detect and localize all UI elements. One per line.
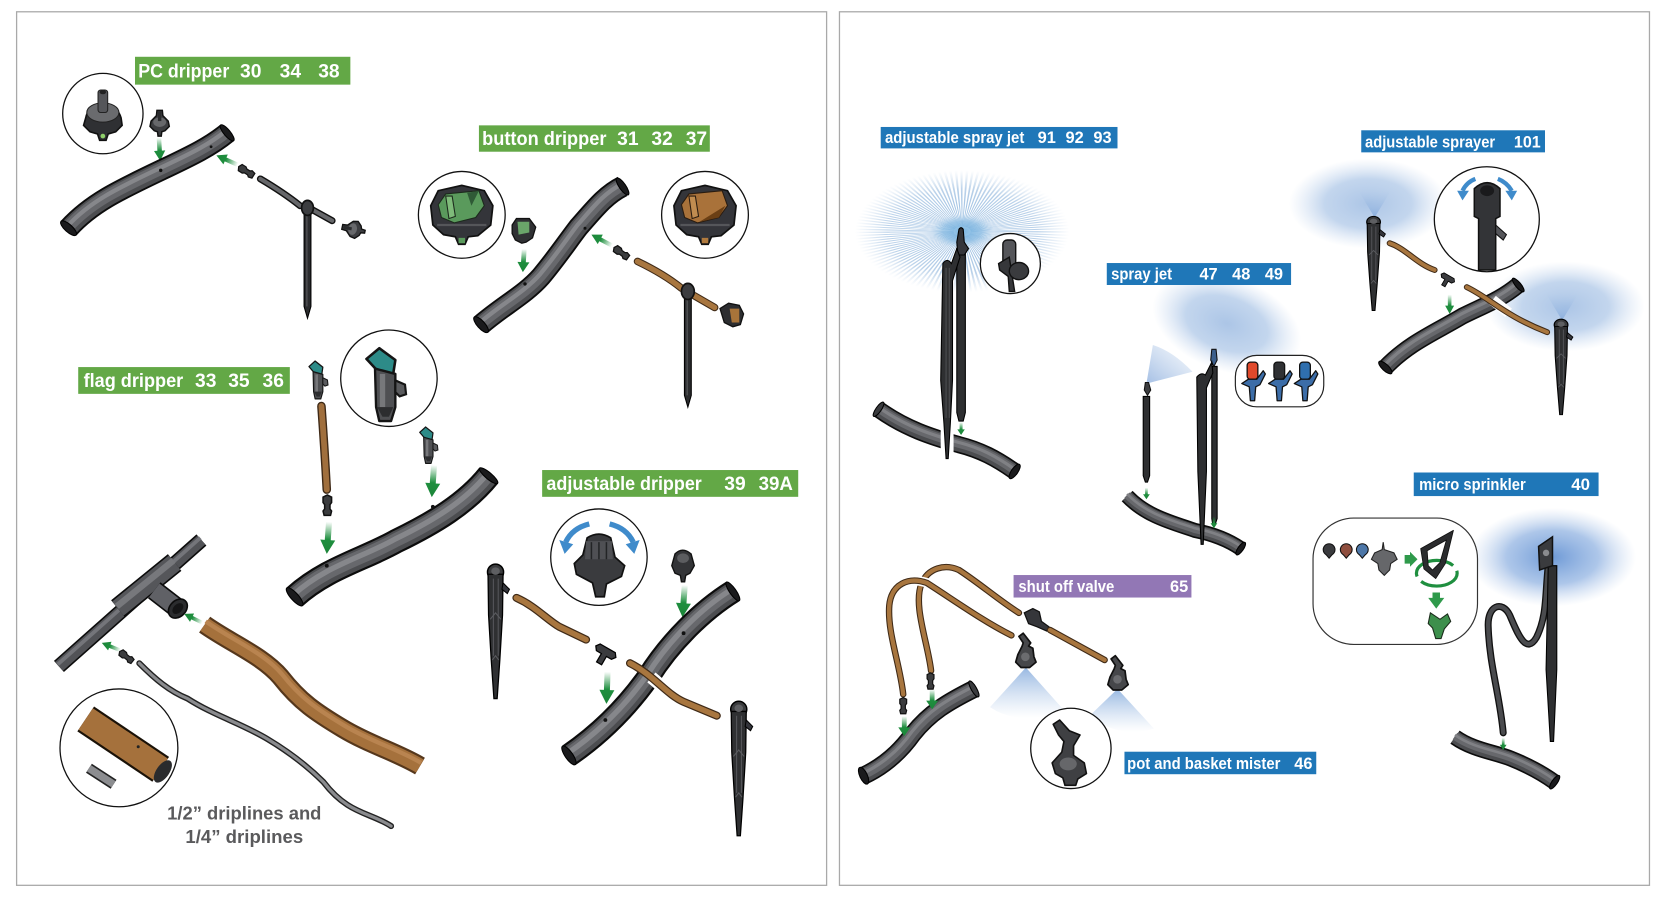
icon: barb connector rear [927, 673, 934, 689]
label: micro sprinkler: micro sprinkler [1419, 475, 1526, 494]
label: shut off valve: 65 [1170, 577, 1188, 596]
label: shut off valve: shut off valve [1018, 577, 1114, 596]
spray fan: mister two [1090, 689, 1154, 732]
arrow: connector into tee [100, 639, 122, 655]
stake: right [731, 701, 753, 836]
icon: dripper at tube end [340, 218, 367, 240]
brown tube: left segment [1390, 243, 1435, 270]
spray fan: left [1359, 191, 1391, 218]
label: spray jet: 47 [1199, 265, 1218, 284]
arrow: dripper into hose [675, 585, 692, 618]
label: spray jet: 48 [1232, 265, 1250, 284]
label: PC dripper: 34 [280, 61, 301, 83]
blue jet [1294, 362, 1318, 401]
inset circle: mister close-up [1031, 708, 1111, 789]
brown tube: right segment over hose [1467, 287, 1547, 332]
inset circle: spray jet close-up [980, 234, 1040, 294]
label: micro sprinkler: 40 [1571, 475, 1590, 494]
hose [1377, 277, 1526, 376]
half-inch hose [559, 580, 742, 767]
spray fan: mister one [990, 668, 1065, 718]
panel: right sprayers [839, 12, 1649, 885]
arrow: dripper into hose [153, 137, 166, 161]
caption: dripline sizes: 1/2” driplines and [167, 803, 321, 824]
label: adjustable spray jet: 93 [1093, 128, 1112, 147]
nozzle: dark [1323, 544, 1335, 558]
inset circle: dripline close-up [60, 689, 178, 807]
assembly: micro sprinkler [1313, 472, 1636, 790]
assembly: shut off valve and pot mister [856, 567, 1316, 789]
arrow: rear connector into hose [926, 689, 938, 709]
half-inch hose [58, 123, 236, 238]
label: adjustable spray jet: adjustable spray jet [885, 128, 1025, 147]
quarter-inch tube [260, 179, 332, 221]
spray glow: left [1289, 159, 1448, 249]
label: shut off valve [1014, 575, 1191, 598]
assembly: adjustable sprayer [1289, 130, 1645, 415]
red jet [1242, 362, 1265, 401]
assembly: driplines [58, 538, 421, 847]
icon: barb connector [118, 649, 135, 664]
label: flag dripper [78, 367, 290, 394]
label: flag dripper: flag dripper [84, 371, 184, 392]
caption: dripline sizes: 1/4” driplines [185, 826, 303, 847]
arrow: riser into hose [957, 422, 965, 435]
stake: right [1554, 319, 1573, 415]
label: button dripper: button dripper [482, 129, 607, 150]
green base [1428, 613, 1451, 639]
label: spray jet: spray jet [1111, 265, 1173, 284]
inset: three spray jet colors [1235, 355, 1324, 407]
spray glow: right [1486, 261, 1645, 351]
icon: small PC dripper [150, 110, 169, 136]
spray glow [930, 214, 994, 249]
label: adjustable sprayer: adjustable sprayer [1365, 132, 1496, 151]
arrow: tee into hose [599, 672, 615, 704]
inset circle: green button dripper [418, 171, 505, 258]
arrow: tube into hose [1500, 738, 1507, 750]
stake with loop [681, 283, 694, 407]
tee connector [1437, 272, 1456, 290]
icon: mister two [1108, 656, 1128, 690]
half-inch hose [471, 176, 631, 335]
inset circle: brown button dripper [662, 171, 748, 258]
half-inch hose [284, 466, 500, 608]
riser: left [1143, 382, 1151, 482]
sprinkler nozzle [1371, 542, 1397, 575]
brown quarter-inch tube [638, 261, 715, 308]
arrow: flag dripper into hose [424, 465, 442, 498]
stake: left [488, 564, 509, 699]
hose [871, 401, 1022, 480]
label: PC dripper: 38 [318, 61, 340, 83]
label: flag dripper: 36 [263, 371, 284, 392]
brown tube: valve to mister [1050, 630, 1105, 660]
label: adjustable spray jet: 91 [1038, 128, 1056, 147]
label: adjustable spray jet [881, 127, 1118, 148]
inset circle: adjustable dripper close-up [551, 509, 647, 605]
half-inch brown dripline [205, 621, 421, 766]
inset circle: PC dripper close-up [63, 73, 143, 154]
hose [856, 680, 981, 786]
icon: small flag dripper on tube [309, 361, 328, 399]
stake with loop [302, 200, 313, 318]
stake and riser [1197, 349, 1217, 544]
spray fan: right [1546, 294, 1578, 320]
quarter-inch gray dripline [139, 663, 391, 826]
assembly: adjustable dripper [488, 470, 798, 836]
label: flag dripper: 33 [195, 371, 217, 392]
icon: barb connector front [900, 698, 907, 714]
arrow: green dripper into hose [517, 249, 530, 272]
icon: mister one [1016, 633, 1036, 668]
inset circle: sprayer close-up [1434, 167, 1539, 272]
sprinkler frame [1421, 530, 1453, 579]
panel: left drippers [17, 12, 827, 885]
label: PC dripper: 30 [240, 61, 261, 83]
label: flag dripper: 35 [228, 371, 250, 392]
label: adjustable spray jet: 92 [1066, 128, 1084, 147]
black jet [1269, 362, 1292, 401]
nozzle: blue [1356, 544, 1368, 558]
label: spray jet [1107, 263, 1291, 285]
sprinkler stake [1539, 537, 1557, 741]
brown tube: front [889, 581, 1011, 694]
brown tube: left segment [516, 598, 586, 640]
arrow: tube into hose [589, 230, 614, 250]
label: button dripper: 32 [651, 129, 673, 150]
curly tube [1488, 566, 1548, 733]
stake: left [1367, 216, 1385, 310]
assembly: button dripper [418, 125, 748, 407]
brown tube: rear [919, 567, 1019, 671]
arrow: tee into hose [1445, 295, 1454, 314]
nozzle: brown [1340, 544, 1352, 558]
hose [1127, 494, 1247, 556]
brown quarter-inch tube [321, 406, 327, 490]
gray tee fitting [58, 538, 201, 666]
rotation arrows [1416, 560, 1457, 586]
caption: dripline sizes [167, 803, 321, 847]
icon: barb connector [612, 245, 630, 261]
hose [1455, 735, 1561, 790]
label: PC dripper: PC dripper [138, 61, 230, 83]
label: adjustable dripper: 39A [759, 474, 793, 495]
icon: flag dripper above hose [420, 427, 438, 463]
arrow: frame to base [1428, 592, 1444, 609]
label: PC dripper [135, 57, 350, 85]
inset: sprinkler parts [1313, 518, 1478, 644]
label: button dripper: 37 [686, 129, 707, 150]
spray fan [1146, 345, 1192, 384]
assembly: adjustable spray jet [871, 127, 1118, 480]
arrow: front connector into hose [898, 716, 910, 736]
icon: barb connector [323, 495, 332, 515]
assembly: PC dripper [58, 57, 367, 318]
arrow: left riser into hose [1143, 488, 1150, 499]
label: adjustable sprayer: 101 [1514, 132, 1541, 151]
label: spray jet: 49 [1265, 265, 1283, 284]
label: micro sprinkler [1414, 472, 1599, 496]
icon: barb connector [237, 164, 255, 179]
label: adjustable dripper: 39 [724, 474, 746, 495]
arrow: connector into hose [319, 521, 337, 554]
label: button dripper: 31 [617, 129, 639, 150]
label: pot and basket mister: pot and basket mister [1127, 754, 1281, 773]
label: adjustable dripper [542, 470, 798, 497]
brown tube: right segment over hose [630, 663, 717, 716]
label: button dripper [479, 125, 710, 152]
arrow: right riser into hose [1211, 517, 1217, 528]
icon: brown dripper at tube end [720, 303, 744, 327]
spray starburst [903, 198, 1021, 265]
assembly: flag dripper [78, 330, 500, 608]
tee connector [589, 643, 618, 669]
shut off valve [1024, 609, 1049, 631]
inset circle: flag dripper close-up [341, 330, 437, 426]
icon: small adjustable dripper [672, 550, 694, 582]
arrow: nozzle to frame [1405, 552, 1418, 567]
stake and riser [941, 228, 969, 461]
label: pot and basket mister: 46 [1294, 754, 1312, 773]
arrow: tube into hose [214, 150, 240, 170]
arrow: brown dripline into tee [182, 610, 204, 627]
label: adjustable sprayer [1361, 130, 1545, 152]
assembly: spray jet [1107, 253, 1324, 556]
spray glow [1469, 508, 1636, 606]
label: adjustable dripper: adjustable dripper [546, 474, 702, 495]
icon: small green button dripper [512, 219, 536, 243]
spray glow [1138, 253, 1315, 394]
